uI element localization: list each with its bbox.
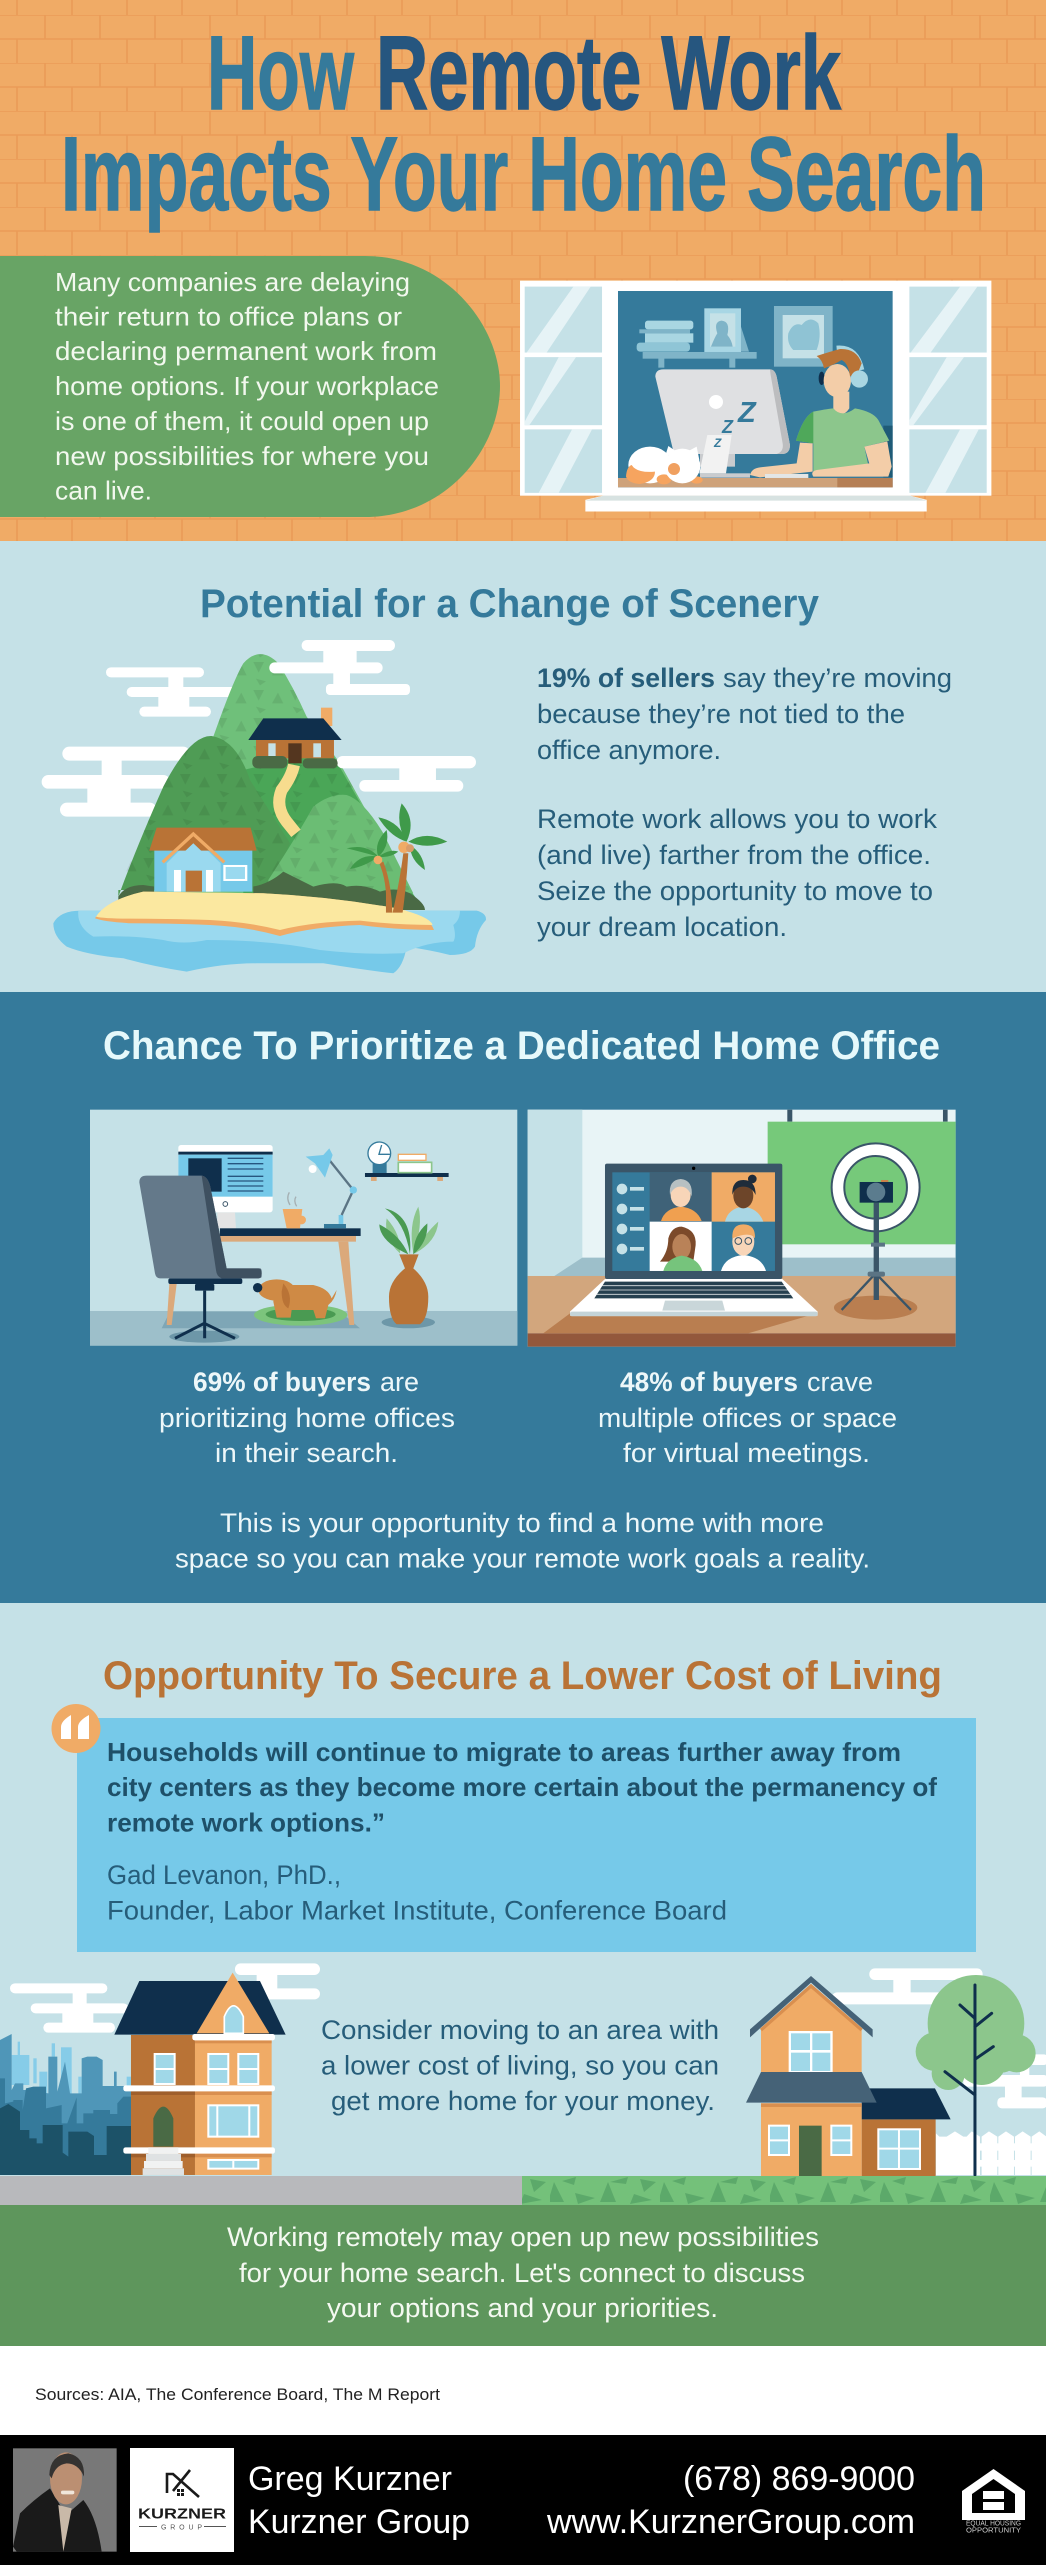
coffee mug [283, 1192, 306, 1228]
shelf with books and frames [637, 306, 833, 368]
text: lower cost of living: get more home for your money. [331, 2086, 715, 2116]
icon: quotation mark badge [52, 1704, 100, 1753]
skyline [0, 2034, 131, 2175]
participants [660, 1175, 766, 1271]
laptop [570, 1164, 818, 1316]
icon: equal housing opportunity: OPPORTUNITY [966, 2528, 1021, 2534]
desk [220, 1228, 361, 1325]
intro panel: new possibilities for where you [55, 441, 429, 471]
sand [95, 892, 434, 936]
monitor [655, 369, 790, 473]
sources: Sources: AIA, The Conference Board, The M Report [35, 2385, 440, 2404]
text: remote work opportunity: Seize the opportunity to move to [537, 876, 933, 906]
text: home office opportunity: space so you can make your remote work goals a reality. [175, 1544, 870, 1574]
illustration: suburban house with tree [746, 1968, 1046, 2177]
quote box: Households will continue to migrate to areas further away from [107, 1737, 901, 1767]
intro panel: can live. [55, 476, 152, 506]
text: lower cost of living: Consider moving to an area with [321, 2015, 719, 2045]
caption: 48% of buyers: crave [807, 1367, 873, 1397]
cabin [248, 708, 342, 768]
house [746, 1976, 951, 2177]
heading: change of scenery: Potential for a Change of Scenery [200, 582, 820, 626]
heading: home office: Chance To Prioritize a Dedicated Home Office [103, 1024, 940, 1068]
caption: 48% of buyers: multiple offices or space [598, 1403, 897, 1433]
agent name: Kurzner Group [248, 2503, 470, 2541]
closing panel: your options and your priorities. [327, 2293, 718, 2323]
quote box: remote work options.” [107, 1808, 385, 1838]
monitor [178, 1145, 273, 1228]
caption: 69% of buyers: 69% of buyers [193, 1367, 371, 1397]
picket fence [936, 2131, 1046, 2175]
section: change of scenery [0, 541, 1046, 992]
shelf with clock and books [365, 1142, 449, 1181]
clouds [832, 1968, 1046, 2108]
company logo: GROUP [161, 2524, 202, 2532]
text: sellers statistic: say they’re moving [723, 663, 952, 693]
blue house [149, 828, 257, 892]
clouds [10, 1963, 320, 2033]
illustration: window with remote worker [520, 281, 991, 511]
contact details [546, 2460, 915, 2541]
mountains [120, 654, 425, 910]
left clouds [42, 667, 260, 817]
illustration: window with remote worker: Z [713, 436, 722, 450]
text: sellers statistic: because they’re not tied to the [537, 699, 905, 729]
text: sellers statistic: 19% of sellers [537, 663, 715, 693]
illustration: window with remote worker: Z [737, 397, 757, 429]
text: remote work opportunity [537, 804, 938, 942]
office chair [139, 1176, 262, 1343]
text: remote work opportunity: Remote work allows you to work [537, 804, 938, 834]
title: Remote Work [376, 15, 841, 132]
header brick background [0, 0, 1046, 541]
company logo [130, 2448, 234, 2552]
caption: 69% of buyers: prioritizing home offices [159, 1403, 455, 1433]
text: sellers statistic: office anymore. [537, 735, 721, 765]
text: remote work opportunity: (and live) farther from the office. [537, 840, 931, 870]
text: lower cost of living: a lower cost of living, so you can [321, 2050, 719, 2080]
agent name: Greg Kurzner [248, 2460, 452, 2498]
contact details: www.KurznerGroup.com [546, 2503, 915, 2541]
company logo: KURZNER [138, 2506, 226, 2522]
text: home office opportunity [175, 1508, 870, 1574]
title: How [207, 15, 354, 132]
intro panel: is one of them, it could open up [55, 406, 429, 436]
agent name [248, 2460, 470, 2541]
text: remote work opportunity: your dream location. [537, 912, 787, 942]
table [528, 1276, 956, 1347]
sources [0, 2346, 1046, 2435]
caption: 48% of buyers [598, 1367, 897, 1468]
palm trees [347, 803, 447, 913]
section: home office [0, 992, 1046, 1603]
quote box: Founder, Labor Market Institute, Conference Board [107, 1896, 727, 1926]
caption: 48% of buyers: for virtual meetings. [623, 1438, 870, 1468]
title [61, 15, 986, 233]
potted plant [379, 1207, 438, 1328]
illustration: window with remote worker: Z [721, 417, 734, 437]
man with headset [750, 348, 893, 477]
ring light on tripod [832, 1143, 920, 1320]
dog on rug [253, 1279, 347, 1326]
townhouse [114, 1973, 286, 2175]
desk lamp [306, 1148, 357, 1228]
icon: equal housing opportunity: EQUAL HOUSING [966, 2520, 1021, 2528]
contact details: (678) 869-9000 [683, 2460, 915, 2498]
agent photo [13, 2448, 117, 2552]
closing panel: for your home search. Let's connect to discuss [239, 2258, 805, 2288]
caption: 69% of buyers: are [380, 1367, 419, 1397]
caption: 48% of buyers: 48% of buyers [620, 1367, 798, 1397]
icon: equal housing opportunity [962, 2469, 1025, 2534]
section: lower cost of living [0, 1603, 1046, 2176]
caption: 69% of buyers [159, 1367, 455, 1468]
quote box: Gad Levanon, PhD., [107, 1860, 341, 1890]
tree [916, 1975, 1036, 2175]
footer bar [0, 2435, 1046, 2565]
ground: pavement and grass [0, 2176, 1046, 2205]
closing panel [0, 2205, 1046, 2346]
text: lower cost of living [321, 2015, 719, 2116]
illustration: desk with dog [90, 1110, 517, 1346]
winding path [279, 765, 296, 833]
text: sellers statistic [537, 663, 952, 765]
intro panel: home options. If your workplace [55, 371, 439, 401]
water [53, 911, 486, 973]
intro panel [0, 256, 500, 517]
intro panel: declaring permanent work from [55, 336, 437, 366]
illustration: laptop video call [528, 1110, 956, 1347]
intro panel: their return to office plans or [55, 302, 402, 332]
text: home office opportunity: This is your opportunity to find a home with more [220, 1508, 824, 1538]
right clouds [269, 640, 476, 792]
sleeping cat [626, 446, 703, 484]
illustration: tropical island [42, 640, 486, 973]
intro panel: Many companies are delaying [55, 267, 410, 297]
heading: lower cost of living: Opportunity To Secure a Lower Cost of Living [103, 1654, 942, 1698]
quote box [77, 1718, 976, 1952]
illustration: city townhouse [0, 1963, 320, 2175]
caption: 69% of buyers: in their search. [215, 1438, 398, 1468]
closing panel: Working remotely may open up new possibilities [227, 2222, 819, 2252]
quote box: city centers as they become more certain about the permanency of [107, 1772, 937, 1802]
